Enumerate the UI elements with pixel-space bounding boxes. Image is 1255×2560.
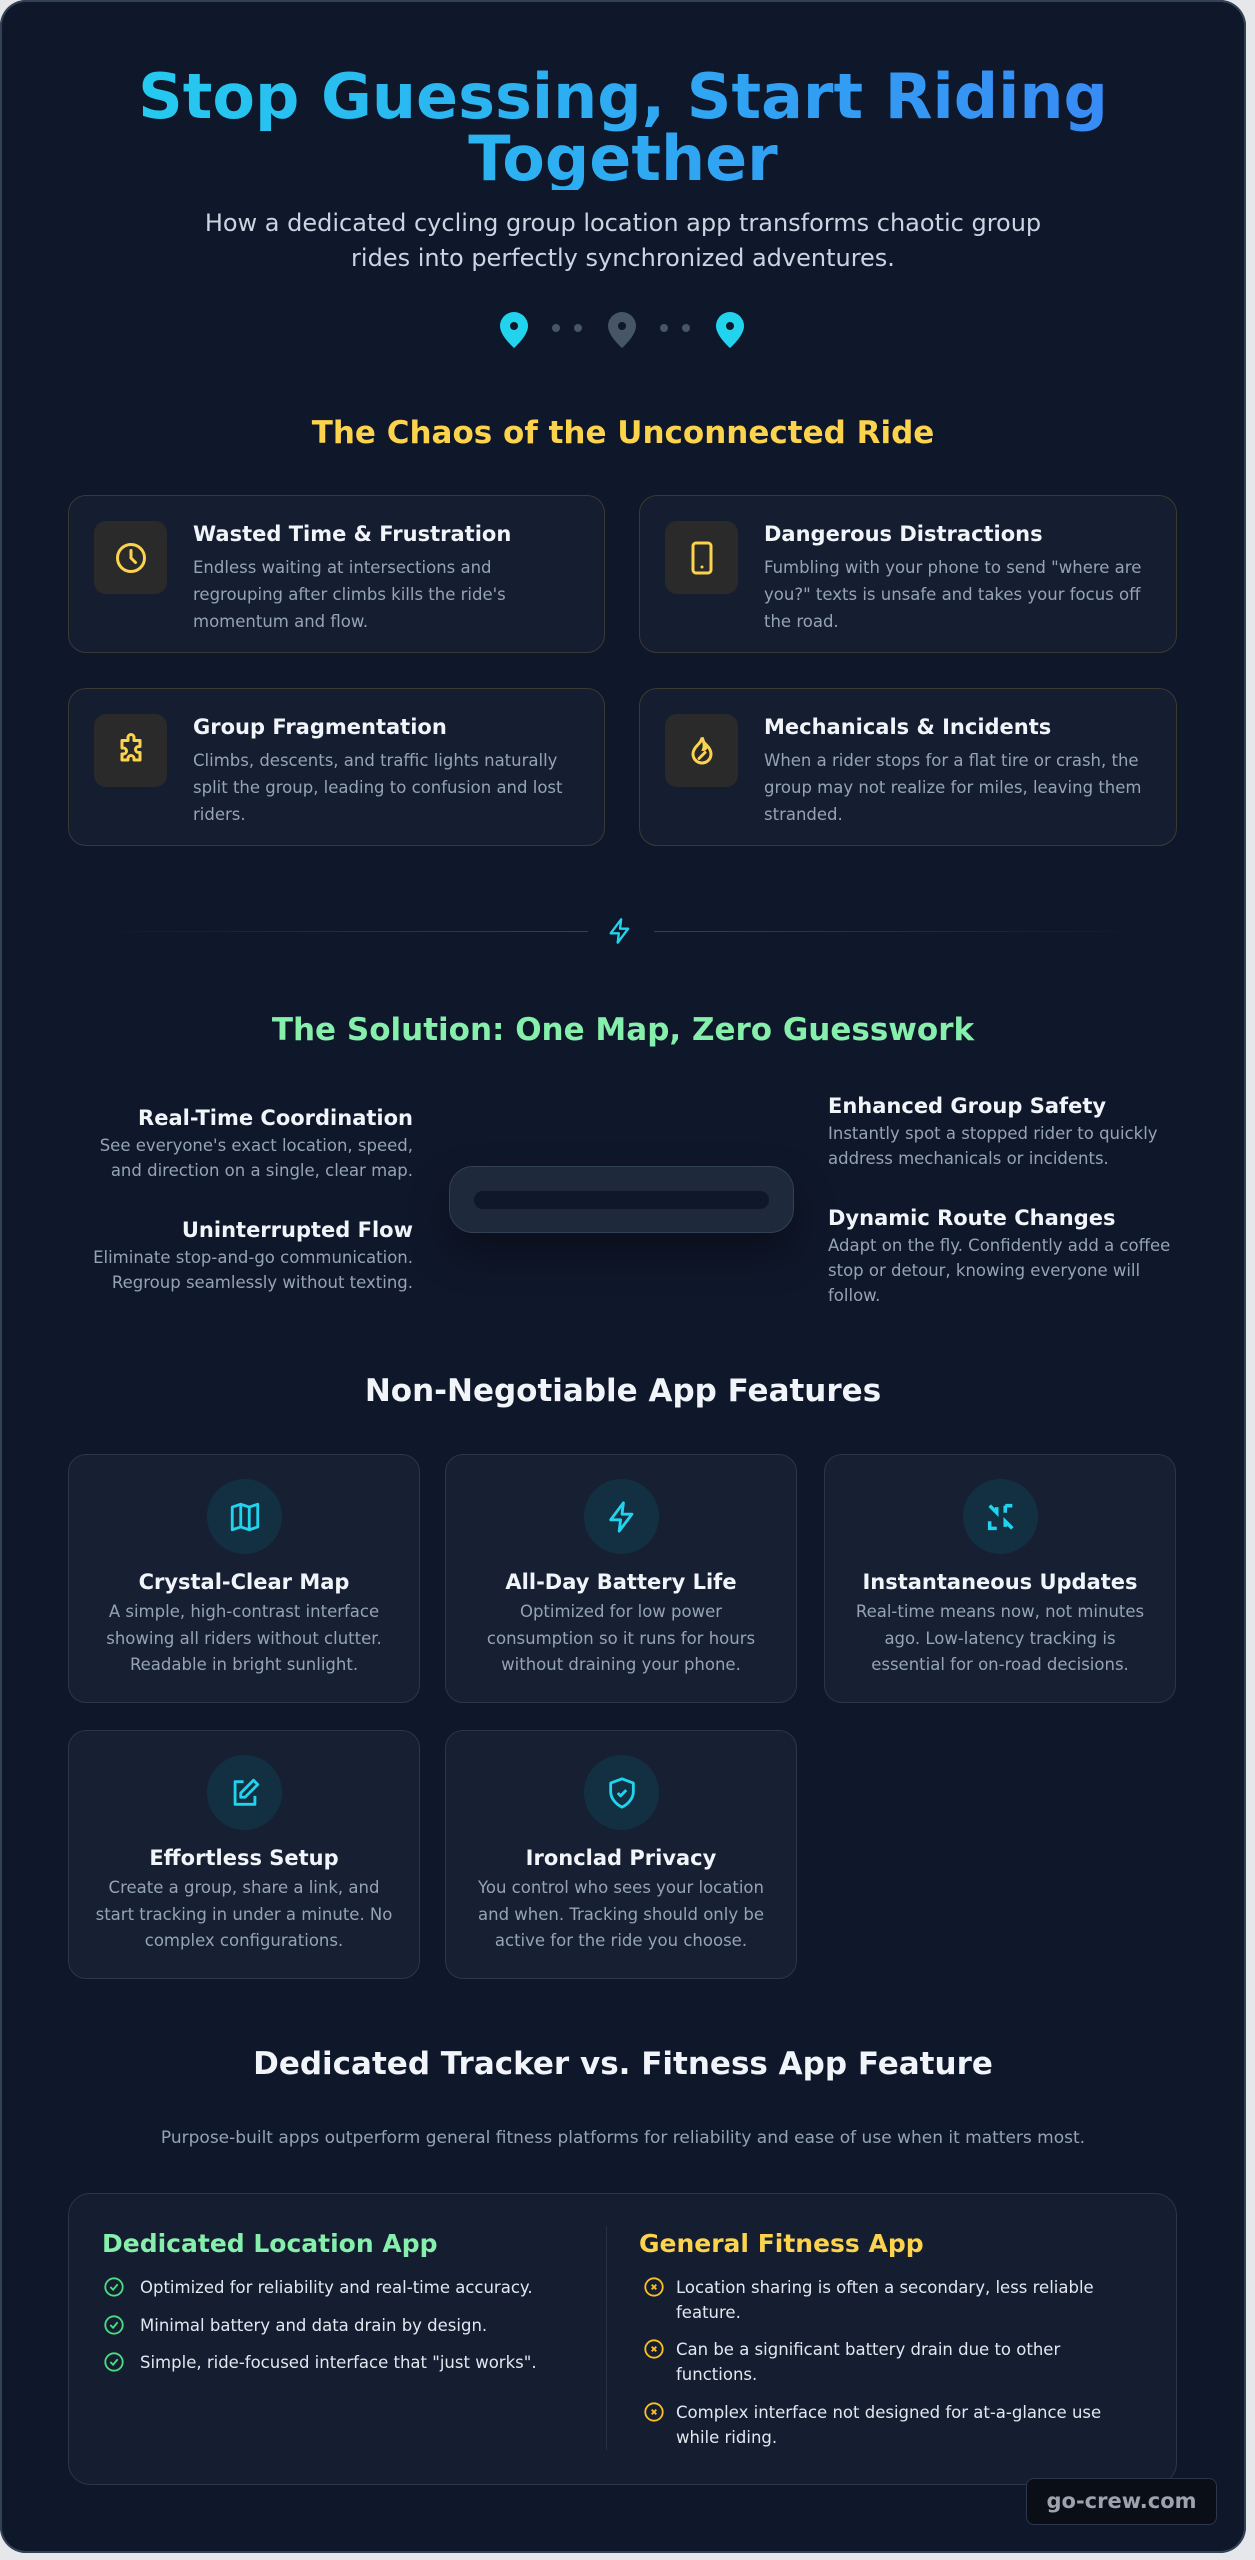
feature: privacy: Ironclad Privacy (526, 1846, 716, 1870)
badge: go-crew.com: go-crew.com (1046, 2489, 1196, 2513)
text: real-time coordination: Real-Time Coordination (138, 1106, 413, 1130)
panel: fragmentation (68, 688, 605, 846)
heading: features: Non-Negotiable App Features (365, 1373, 881, 1409)
list: fitness: Can be a significant battery drain due to other functions. (676, 2340, 1060, 2384)
feature: map: Crystal-Clear Map (139, 1570, 349, 1594)
feature: updates (824, 1454, 1176, 1703)
panel: mechanicals: Mechanicals & Incidents (764, 715, 1051, 739)
divider with bolt icon (164, 918, 1078, 944)
text: dynamic route: Dynamic Route Changes (828, 1206, 1115, 1230)
comparison subtitle: Purpose-built apps outperform general fitness platforms for reliability and ease of use when it matters most. (161, 2128, 1085, 2148)
list: dedicated: Simple, ride-focused interface that "just works". (140, 2353, 537, 2372)
text: enhanced safety: Enhanced Group Safety (828, 1094, 1106, 1118)
heading: chaos: The Chaos of the Unconnected Ride (312, 415, 934, 451)
panel: comparison (68, 2193, 1177, 2485)
feature: battery: Optimized for low power consumption so it runs for hours without draining your phone. (487, 1602, 755, 1674)
icon: map (207, 1479, 282, 1554)
icon: phone (665, 521, 738, 594)
text: real-time coordination (100, 1106, 413, 1180)
text: dynamic route: Adapt on the fly. Confidently add a coffee stop or detour, knowing everyone will follow. (828, 1236, 1170, 1305)
icon: location pins (500, 312, 744, 348)
list: dedicated: Optimized for reliability and real-time accuracy. (140, 2278, 533, 2297)
heading: solution: The Solution: One Map, Zero Guesswork (272, 1012, 974, 1048)
feature: setup: Effortless Setup (149, 1846, 339, 1870)
text: uninterrupted flow (93, 1218, 413, 1292)
icon: puzzle (94, 714, 167, 787)
text: uninterrupted flow: Uninterrupted Flow (182, 1218, 413, 1242)
panel: distractions (639, 495, 1177, 653)
title (0, 66, 1246, 190)
icon: shield (584, 1755, 659, 1830)
text: uninterrupted flow: Eliminate stop-and-go communication. Regroup seamlessly without texting. (93, 1248, 413, 1292)
panel: wasted time: Wasted Time & Frustration (193, 522, 511, 546)
heading: fitness: General Fitness App (639, 2229, 924, 2258)
icon: flame (665, 714, 738, 787)
list: fitness (644, 2277, 1101, 2447)
title: Together (468, 122, 778, 195)
panel: fragmentation: Climbs, descents, and traffic lights naturally split the group, leading to confusion and lost riders. (193, 751, 562, 824)
panel: distractions: Dangerous Distractions (764, 522, 1043, 546)
list: dedicated (104, 2277, 537, 2372)
badge: go-crew.com (1026, 2478, 1217, 2525)
list: fitness: Location sharing is often a secondary, less reliable feature. (676, 2278, 1094, 2322)
feature: updates: Real-time means now, not minutes ago. Low-latency tracking is essential for on-road decisions. (856, 1602, 1144, 1674)
feature: setup: Create a group, share a link, and start tracking in under a minute. No complex configurations. (96, 1878, 392, 1950)
icon: bolt (584, 1479, 659, 1554)
feature: map: A simple, high-contrast interface showing all riders without clutter. Readable in bright sunlight. (106, 1602, 382, 1674)
feature: setup (68, 1730, 420, 1979)
icon: arrows (963, 1479, 1038, 1554)
panel: wasted time: Endless waiting at intersections and regrouping after climbs kills the ride's momentum and flow. (193, 558, 506, 631)
panel: mechanicals: When a rider stops for a flat tire or crash, the group may not realize for miles, leaving them stranded. (764, 751, 1141, 824)
feature: privacy: You control who sees your location and when. Tracking should only be active for the ride you choose. (478, 1878, 764, 1950)
subtitle: How a dedicated cycling group location app transforms chaotic group rides into perfectly synchronized adventures. (205, 209, 1041, 272)
heading: dedicated: Dedicated Location App (102, 2229, 438, 2258)
heading: comparison: Dedicated Tracker vs. Fitness App Feature (253, 2046, 993, 2082)
text: enhanced safety: Instantly spot a stopped rider to quickly address mechanicals or incidents. (828, 1124, 1158, 1168)
icon: edit (207, 1755, 282, 1830)
text: dynamic route (828, 1206, 1170, 1305)
panel: fragmentation: Group Fragmentation (193, 715, 447, 739)
feature: battery: All-Day Battery Life (505, 1570, 737, 1594)
icon: clock (94, 521, 167, 594)
list: fitness: Complex interface not designed for at-a-glance use while riding. (676, 2403, 1101, 2447)
text: real-time coordination: See everyone's exact location, speed, and direction on a single, clear map. (100, 1136, 413, 1180)
panel: distractions: Fumbling with your phone to send "where are you?" texts is unsafe and takes your focus off the road. (764, 558, 1141, 631)
feature: updates: Instantaneous Updates (862, 1570, 1138, 1594)
feature: battery (445, 1454, 797, 1703)
text: enhanced safety (828, 1094, 1158, 1168)
panel: wasted time (68, 495, 605, 653)
phone graphic (449, 1166, 794, 1233)
list: dedicated: Minimal battery and data drain by design. (140, 2316, 487, 2335)
title: Stop Guessing, Start Riding (138, 60, 1108, 133)
feature: privacy (445, 1730, 797, 1979)
panel: mechanicals (639, 688, 1177, 846)
feature: map (68, 1454, 420, 1703)
